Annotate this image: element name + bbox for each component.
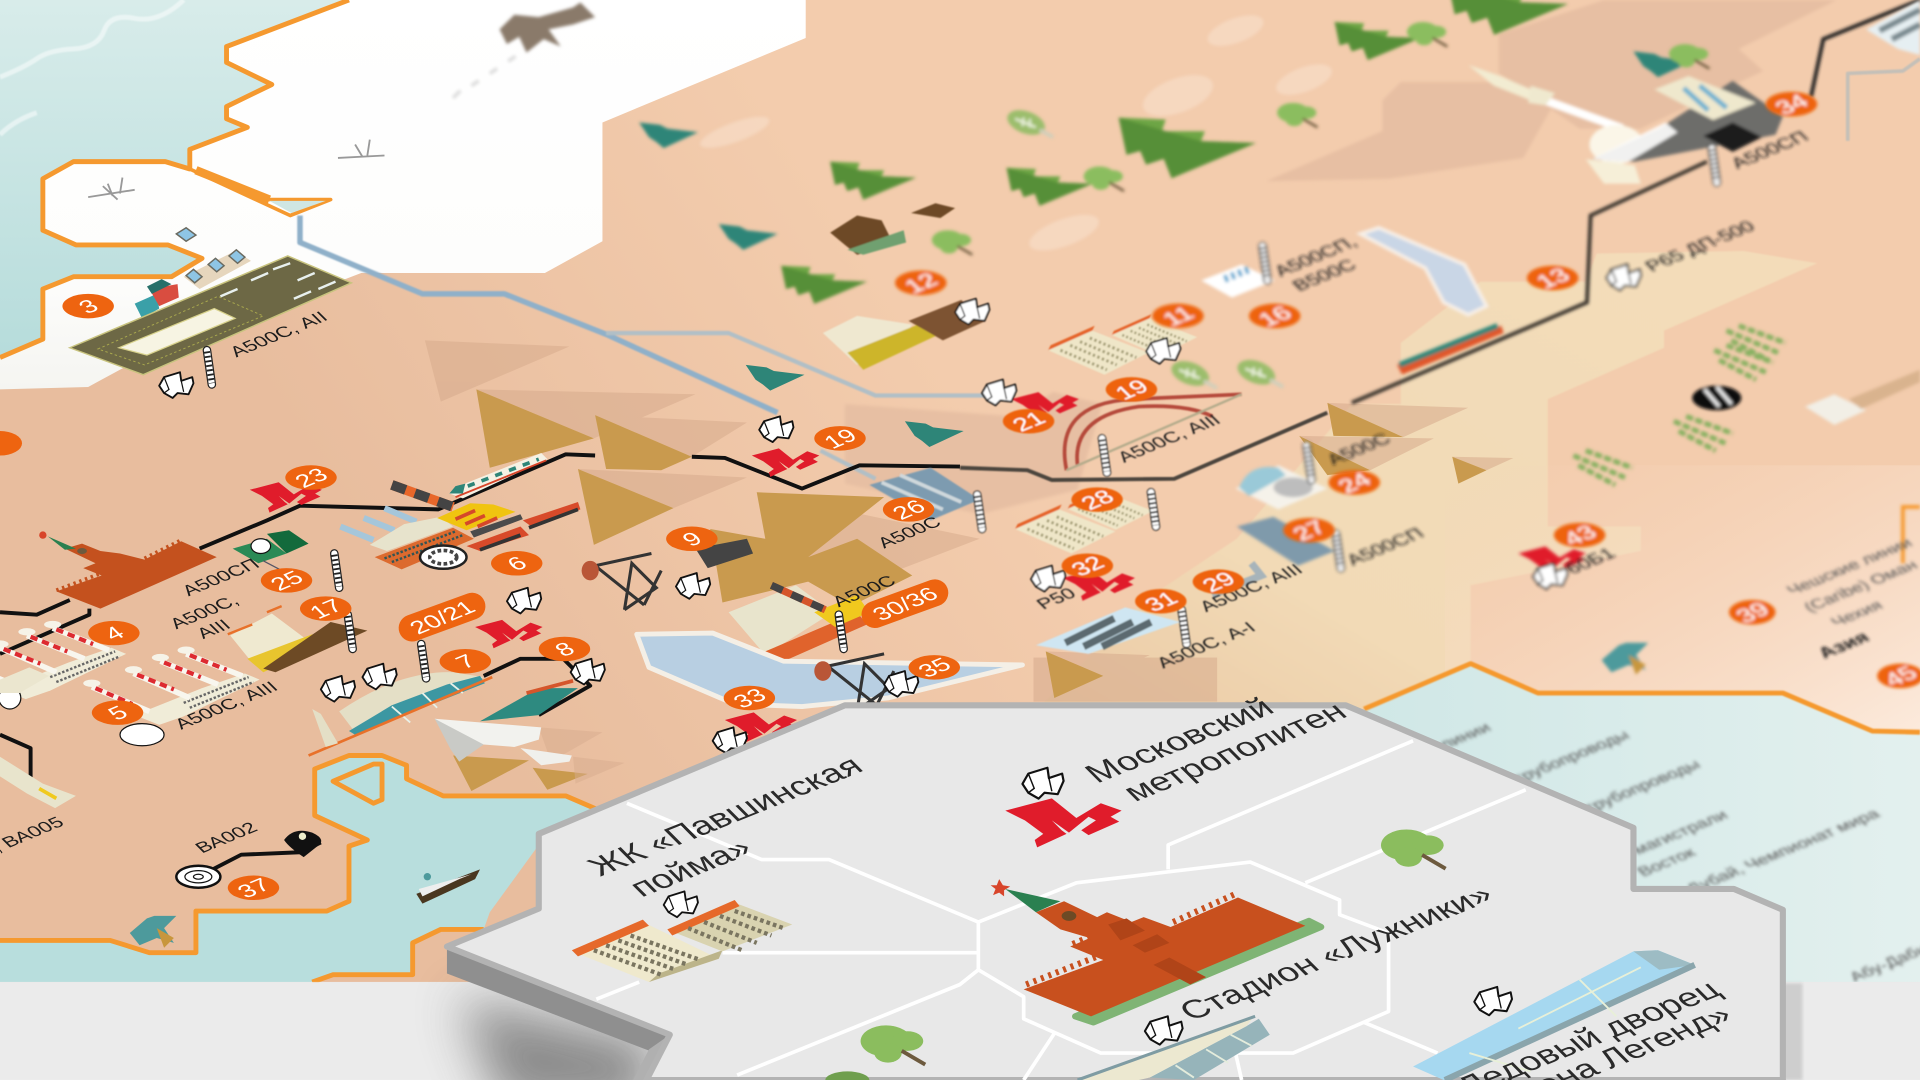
item: plant 12 [823, 299, 989, 370]
lagoon fill at pipeline head [269, 201, 326, 213]
birds on snow [88, 140, 384, 200]
labels: far map: А500СП [1343, 525, 1429, 569]
number badges: near: 9 [677, 528, 708, 551]
labels: far map [1270, 129, 1920, 985]
labels: west map: А500С [874, 514, 946, 552]
panel: hand stadium [1145, 1016, 1183, 1045]
number badges: near: 33 [728, 684, 772, 713]
labels: middle map: Р50 [1033, 585, 1081, 613]
panel text: metro: метрополитен [1116, 697, 1354, 807]
number badges: far: 43 [1558, 522, 1602, 550]
item: launch site [1586, 76, 1783, 184]
rail line top right, blurred [1811, 0, 1920, 97]
pipelines [300, 59, 1920, 479]
number badges: middle distance: 19 [1110, 376, 1154, 404]
tower base [0, 757, 76, 808]
item: dome 24 [1236, 446, 1327, 509]
item: metro 32 [1031, 566, 1135, 601]
labels: middle map: А500С, АIII [1114, 412, 1225, 466]
number badges: near: 4 [99, 622, 130, 645]
number badges: far: 34 [1770, 91, 1814, 119]
labels: west map: А500С, [166, 593, 243, 633]
labels: far map: магистрали [1629, 807, 1732, 857]
labels: far map: Чешские линии [1783, 535, 1916, 598]
number badges: middle distance: 29 [1197, 568, 1241, 596]
palm island west [130, 916, 176, 948]
factories group 5 [83, 647, 260, 746]
panel text: residential complex: пойма» [622, 833, 760, 903]
icon: target and pin BA002 [176, 831, 321, 888]
rail line far, blurred [960, 413, 1327, 480]
central factory 6 [340, 485, 580, 569]
panel: tree [1381, 829, 1446, 869]
icon: rod near 25 and 17 [334, 553, 353, 649]
labels: middle map: А500С, А-I [1153, 620, 1260, 672]
labels: far map: Чехия [1827, 598, 1887, 630]
factory 30/36 [729, 585, 869, 661]
power plant 17 [228, 606, 367, 672]
number badges: far [895, 91, 1920, 691]
legend panel [447, 692, 1783, 1080]
item: rocket [1468, 65, 1622, 129]
panel right shadow [1783, 983, 1802, 1080]
right sea [1347, 664, 1920, 982]
number badges: far: 24 [1333, 469, 1377, 497]
labels: far map: Дубай, Чемпионат мира [1683, 806, 1884, 896]
labels: far map: В500С [1289, 257, 1361, 295]
labels: far map: А500СП, [1270, 234, 1362, 280]
metro icons near west [250, 416, 819, 753]
number badges: near: 3 [73, 295, 104, 318]
item: palm east [1602, 643, 1648, 675]
panel: residential buildings [572, 900, 792, 982]
panel: stadium building [1078, 1016, 1270, 1080]
oil pump 9 [582, 539, 753, 610]
moose and tracks [453, 2, 595, 98]
panel: ice palace building [1413, 950, 1695, 1080]
ice palace 8 [480, 659, 605, 721]
label: А500С, АII: А500С, АII [226, 309, 332, 361]
item: hand 13 [1607, 264, 1641, 290]
terrain: darker highlands [845, 0, 1837, 514]
item: building 31 [1036, 607, 1187, 654]
panel text: stadium: Стадион «Лужники» [1172, 880, 1501, 1027]
number badges: near: 26 [887, 496, 931, 524]
icon: airport hand and rod [159, 350, 212, 398]
labels: west map: А500С [828, 573, 901, 611]
top-left sea [0, 0, 349, 358]
labels: far map: А500СП [1727, 129, 1813, 172]
labels: far map: А500С [1323, 431, 1395, 469]
item: road segments 29 [1212, 563, 1261, 595]
item: arch bridge 19 [1065, 394, 1242, 473]
number badges: far: 11 [1158, 303, 1200, 330]
snow-capped peaks [435, 719, 624, 784]
snow region [0, 0, 806, 389]
panel: round trees bottom [825, 1025, 925, 1080]
number badges: near: 8 [550, 638, 580, 661]
panel text: residential complex: ЖК «Павшинская [581, 751, 870, 882]
number badges: near: 6 [502, 552, 533, 575]
item: lake [1360, 228, 1487, 315]
far region items [1201, 0, 1920, 675]
item: buildings 11 [1048, 314, 1197, 375]
panel district lines [596, 741, 1526, 1080]
panel side faces [447, 947, 670, 1080]
panel: hand icon residential [664, 891, 698, 917]
terrain: sand desert [1041, 251, 1817, 709]
trees: far north forest [639, 0, 1709, 391]
item: metro 43 [1518, 546, 1586, 589]
labels: far map: трубопроводы [1509, 728, 1633, 786]
item: buildings 28 [1015, 488, 1156, 553]
sea waves [0, 0, 184, 135]
labels: middle map: А500С, АIII [1196, 561, 1307, 615]
item: plants [1573, 326, 1785, 485]
stadium 7 [309, 644, 492, 756]
panel: Kremlin [991, 879, 1321, 1022]
labels: far map: трубопроводы [1580, 757, 1704, 816]
labels: west map: ВА002 [192, 820, 262, 857]
number badges: near: 5 [103, 702, 134, 725]
railway lines [0, 454, 960, 877]
number badges: far: 39 [1731, 599, 1775, 627]
teal trees near [746, 365, 964, 447]
labels: far map: Восток [1634, 845, 1700, 879]
icon: football flag [233, 530, 309, 573]
lower-left sea [0, 756, 600, 982]
panel: metro sign [1005, 768, 1122, 847]
item: building 27 [1237, 517, 1341, 568]
panel shadow [459, 998, 655, 1080]
bottom band [0, 982, 1920, 1080]
item: train [1397, 323, 1504, 375]
number badges: middle distance [1003, 376, 1244, 616]
item: metro and hand 21 [982, 380, 1079, 420]
number badges: near [0, 294, 960, 903]
item: small white site 14 [1201, 246, 1275, 298]
number badges: far: 16 [1253, 302, 1297, 331]
factories group 4 [0, 621, 126, 709]
labels: far map: (Caribe) Оман [1800, 557, 1920, 615]
labels: far map: линии [1435, 720, 1495, 752]
panel text: metro: Московский [1078, 692, 1281, 789]
number badges: near: 17 [304, 595, 348, 623]
labels: west map: АIII [193, 617, 235, 642]
labels: west map [0, 514, 946, 875]
mountains: shadow shapes [425, 340, 1513, 702]
number badges: near: 19 [819, 425, 863, 453]
Kremlin small [39, 531, 217, 609]
number badges: middle distance: 32 [1066, 552, 1110, 581]
number badges: near: 7 [451, 650, 481, 673]
labels: west map: А500СП [178, 556, 264, 600]
item: orange frame east [1903, 507, 1920, 563]
airport with runway [70, 228, 351, 375]
number badges: near: 25 [265, 567, 309, 595]
number badges: far: 27 [1288, 517, 1332, 545]
item: stripes top right [1866, 0, 1920, 55]
item: site and road east [1805, 370, 1920, 425]
item: zebra animal [1692, 386, 1741, 410]
labels: far map: 60Б1 [1562, 546, 1620, 578]
mountains: tan pyramids [453, 389, 1487, 791]
labels: west map: А500С, АIII [171, 679, 282, 733]
building 26 striped [869, 468, 982, 529]
bears [830, 203, 955, 255]
terrain: pale far right land [1445, 465, 1920, 735]
lake with oil pump 35 [637, 633, 1022, 710]
number badges: near: 23 [290, 464, 334, 492]
labels: far map: Р65 ДП-500 [1641, 218, 1760, 275]
number badges: far: 13 [1531, 264, 1575, 293]
number badges: near: 20/21 [404, 597, 481, 639]
labels: far map: Азия [1814, 629, 1874, 662]
number badges: far: 12 [900, 269, 943, 298]
number badges: middle distance: 21 [1007, 408, 1051, 436]
number badges: near: 37 [232, 874, 276, 903]
labels: middle map [1033, 412, 1307, 672]
number badges: middle distance: 28 [1076, 486, 1120, 514]
rail line far right, blurred [1352, 162, 1707, 403]
train on line [449, 453, 547, 498]
number badges: middle distance: 31 [1140, 588, 1183, 616]
mid region items [823, 299, 1261, 654]
number badges: near: 30/36 [867, 583, 944, 625]
number badges: near: 35 [913, 654, 957, 682]
panel: hand ice palace [1474, 987, 1512, 1015]
ship [416, 869, 480, 904]
